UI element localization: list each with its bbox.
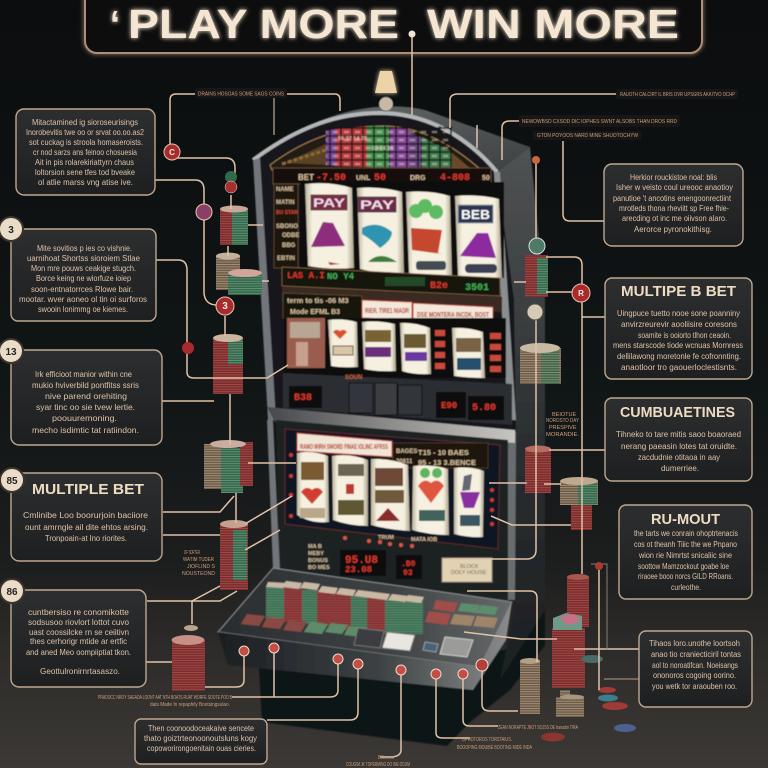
upper display panel xyxy=(283,373,512,425)
connector lines xyxy=(146,35,639,757)
chip stack: right upper xyxy=(525,255,548,297)
chip stack: tan and red xyxy=(560,477,598,530)
panel: left 5: uast coossilcke rn se ceiitivn xyxy=(29,627,129,637)
panel: left 1: sot cuckag is stroola homaseroists. xyxy=(29,137,143,147)
panel: multiple bet right: Uingpuce tuetto nooe sone poanniny xyxy=(617,308,741,318)
panel: left 5 xyxy=(11,590,146,687)
panel: left 1: Mitactamined ig sioroseurisings xyxy=(32,117,138,127)
receipt window: DOLY HOUSE xyxy=(451,570,487,576)
top right callout label xyxy=(616,89,738,99)
panel: right 1 xyxy=(604,164,743,246)
chip stack: upper left xyxy=(220,206,248,245)
panel: ru-mout: cos ot theanh Tiiic the we Pnpano xyxy=(634,539,737,549)
chip stacks xyxy=(172,206,636,742)
title pin dot xyxy=(408,30,416,38)
upper reels: PAY xyxy=(360,198,394,212)
number badge 3 xyxy=(0,217,23,241)
credit strip: 4-808 xyxy=(440,173,470,184)
number badge 86: 86 xyxy=(6,587,18,598)
panel: left 3 xyxy=(11,350,162,445)
chip stack: right tan xyxy=(520,343,561,384)
deck buttons xyxy=(241,600,498,657)
lower screen xyxy=(285,429,500,549)
lower screen: 30811 xyxy=(396,459,413,465)
loose chips xyxy=(541,655,636,742)
top right callout label: RAUOTH CALCIRT IL BRIS OVR UPSGRS AKKITVO OCHP xyxy=(620,92,735,98)
panel: left 3: poouuremoning. xyxy=(52,413,117,423)
number badge 13 xyxy=(0,339,23,363)
left feature labels xyxy=(274,184,299,268)
panel: left 2: swooin lonimmg oe kiemes. xyxy=(38,304,128,314)
number badge 85: 85 xyxy=(6,476,18,487)
small label: right column xyxy=(546,412,579,438)
upper cabinet top xyxy=(310,106,530,172)
panel: left 5: and aned Meo oompiiptiat tkon. xyxy=(26,647,131,657)
lower header text block: RIER. TIRE1 NIADR xyxy=(365,308,409,315)
small label: left column: OF SORTER xyxy=(184,550,200,556)
top left callout label xyxy=(195,88,287,98)
panel: left 2: Mon mre pouws ceakige stugch. xyxy=(31,263,136,273)
number badge 3: 3 xyxy=(8,225,14,236)
credit strip: -7.50 xyxy=(316,173,346,184)
panel: multiple bet right: anvirzreurevir aooliisire coresons xyxy=(621,319,737,329)
panel: left 2: soon-entnatorrces Rlowe bair. xyxy=(31,284,133,294)
panel: right 1: Herkior rouckistoe noal: blis xyxy=(630,172,717,182)
left feature labels: SBONO xyxy=(276,224,298,230)
panel: left 3: syar tinc oo sie tvew lertie. xyxy=(36,402,135,412)
pay table: 68 24 16 xyxy=(372,146,393,152)
panel: multiple bet right: anaotloor tro gaouerloclestisnts. xyxy=(621,362,737,372)
small lamps and tag: TRUM xyxy=(378,535,394,541)
LED strip: LAS A.I xyxy=(287,271,325,281)
chip stack: green group xyxy=(204,440,253,493)
credit strip: DRG xyxy=(410,175,426,182)
panel: ru-mout: riraoee booo norcs GILD RRoans. xyxy=(638,571,733,581)
small lamps and tag: MATA IOB xyxy=(411,537,437,543)
panel: cumbuaetines xyxy=(605,398,752,481)
panel: left 3: nive parend orehiting xyxy=(45,391,127,401)
bottom left caption: PRADOCC NROY SHEADA LOONT AAT NTH BOATS RUAT WORFE SOOTE POO B xyxy=(98,695,232,701)
red LED displays xyxy=(340,550,422,579)
connector badges: R xyxy=(578,289,584,298)
red LED displays: .B0 xyxy=(401,560,416,569)
bottom center captions: ZEAN NORAPTE JNOT SOJSS DE banadio TIRA xyxy=(498,725,578,731)
panel: right 5: ononoros cogoing oorino. xyxy=(653,670,736,680)
panel: right 5: you wetk tor araouben roo. xyxy=(652,681,737,691)
beacon lamp xyxy=(375,71,397,111)
panel: right 1: Aerorce pyronokithisg. xyxy=(634,224,712,234)
machine small label xyxy=(308,544,330,571)
chip stack: tan pair xyxy=(216,252,262,295)
panel: ru-mout: the tarts we conrain ohoptrtenacis xyxy=(634,528,738,538)
pay table xyxy=(270,126,490,178)
bottom center captions: Bilioeus xyxy=(378,755,394,761)
bottom center captions: COUGIM JK TOPERMING DO INE ODUM xyxy=(346,762,410,768)
panel: left 1 xyxy=(16,109,155,195)
panel: ru-mout: curleothe. xyxy=(671,582,701,592)
lower screen: BAGES xyxy=(396,449,417,455)
panel: multiple bet left: Cmlinibe Loo boorurjoin baciiore xyxy=(23,510,148,520)
panel: multiple bet right: mens starscode tiode wcnuas Mornress xyxy=(613,340,743,350)
right side panel xyxy=(497,147,545,680)
upper reels: PAY xyxy=(313,196,345,210)
bottom center captions: BOOOPING MOUIBE BOOTING MIDE INDA xyxy=(457,745,532,751)
credit strip: UNL xyxy=(356,175,371,182)
number badge 13: 13 xyxy=(5,347,17,358)
title banner xyxy=(85,0,702,53)
pay table: 56 32 14 28 xyxy=(338,136,367,142)
panel: right 1: panutioe 't ancotins enengoonrectiint xyxy=(613,193,732,203)
second callout label: GTON POYOOS NARD MINE SHUOTOCHYW xyxy=(537,133,639,139)
upper reels xyxy=(300,182,504,279)
connector badges: 3 xyxy=(222,301,228,312)
coin stacks xyxy=(520,658,584,717)
panel: left 5: thes cerhorigr mtide ar ertfic xyxy=(30,636,128,646)
lower screen: 95 - 13 3.BENCE xyxy=(418,458,476,467)
panel: left 3: mukio hviverbild pontfitss ssris xyxy=(32,380,139,390)
panel: multiple bet left: MULTIPLE BET xyxy=(32,481,144,498)
left feature labels: BU STAR xyxy=(276,210,298,216)
LED strip: B2e xyxy=(430,281,448,292)
chip stack: tall red right xyxy=(567,574,589,627)
small label: left column: WATIM TUDER xyxy=(183,557,214,563)
left feature labels: MATIN xyxy=(276,200,295,206)
panel: cumbuaetines: Tihneko to tare mitis saoo boaoraed xyxy=(616,429,741,439)
strip of small labels xyxy=(282,287,502,312)
panel: cumbuaetines: CUMBUAETINES xyxy=(620,404,735,421)
panel: bottom: Then coonoodoceakaive sencete xyxy=(148,723,254,733)
panel: left 5: cuntbersiso re conomikotte xyxy=(28,607,129,617)
number badge 85 xyxy=(0,468,24,492)
panel: right 1: mrotleds thona rheviitt sp Free fhie- xyxy=(619,203,729,213)
small label: right column: BEIOTUE xyxy=(552,412,576,418)
upper reels: BEB xyxy=(461,207,490,222)
panel: bottom xyxy=(135,719,267,764)
lower screen: T15 - 10 BAES xyxy=(418,448,469,457)
panel: ru-mout xyxy=(619,505,752,599)
panel: multiple bet left: ount amrngle ail dite ehtos arsing. xyxy=(25,522,148,532)
credit strip: 50 xyxy=(374,173,386,184)
panel: left 3: mecho isdimtic tat ratiindon. xyxy=(32,425,139,435)
machine small label: BO MES xyxy=(308,565,330,571)
bottom reels xyxy=(289,452,494,537)
lower header text block: DSE MONTERA INCDK, BOST xyxy=(417,312,490,319)
credit strip: 50 xyxy=(482,175,490,182)
left feature labels: EBTIN xyxy=(277,256,295,262)
panel: left 1: cr nod sarzs ans feinoo chosuesia xyxy=(33,147,137,157)
small label: right column: NOROSTO DAY xyxy=(546,418,579,424)
small label: right column: PRESPIVE xyxy=(549,425,577,431)
panel: multiple bet left xyxy=(11,473,162,561)
panel: right 1: Isher w veisto coul ureooc anaotioy xyxy=(616,182,734,192)
deck front xyxy=(218,602,512,690)
upper right callout label xyxy=(519,115,680,127)
chrome arch band xyxy=(253,113,497,172)
number badge 86 xyxy=(0,579,24,603)
panel: left 1: loltorsion sene tfes tod bveake xyxy=(35,167,135,177)
bottom left caption xyxy=(98,695,232,708)
chrome ledge xyxy=(267,407,515,443)
chip stack: big red colourful top xyxy=(552,613,585,688)
title banner: PLAY MORE xyxy=(128,1,399,47)
slot machine xyxy=(218,106,545,746)
chip stack: middle left xyxy=(213,334,243,394)
lower cabinet xyxy=(276,420,508,602)
cabinet arch frame xyxy=(253,113,516,440)
panel: cumbuaetines: zacdudnie otitaoa in aay xyxy=(638,452,721,462)
panel: right 5 xyxy=(639,631,752,707)
title banner: WIN MORE xyxy=(427,1,679,47)
panel: right 5: aol to noroatifcan. Noeisangs xyxy=(652,660,738,670)
panel: ru-mout: soottow Mamzockout goabe loe xyxy=(638,561,729,571)
chip stack: right red xyxy=(525,446,551,493)
panel: cumbuaetines: nerang paeasin lotes tat oruidte. xyxy=(621,441,737,451)
panel: cumbuaetines: dumerriee. xyxy=(661,463,699,473)
chrome frame sides xyxy=(253,158,516,600)
small label: right column: MORANDIE. xyxy=(546,432,579,438)
left feature labels: BBG xyxy=(282,243,296,249)
connector badges xyxy=(164,144,603,679)
top left callout label: DRAINS HOSOAS SOME SAGS COINS xyxy=(198,92,284,98)
red LED displays: 23.08 xyxy=(345,565,372,575)
title banner: ‘ xyxy=(110,3,120,44)
panel: left 1: Ait in pis rolarekiriattyrn chaus xyxy=(35,157,134,167)
panel: ru-mout: wion rie Nimrtst snicaliic sine xyxy=(638,550,732,560)
control deck xyxy=(218,568,512,667)
small label: left column xyxy=(182,550,215,577)
chip stack: tall red green xyxy=(220,520,248,590)
lower header text block: Mode EFML B3 xyxy=(290,309,340,316)
panel: multiple bet right: dellilawong moretonle fe cofronnting. xyxy=(617,351,741,361)
red LED displays: 95.U8 xyxy=(345,555,378,567)
panel: left 2: Borce keing ne wiorfuze ioiep xyxy=(36,273,131,283)
small lamps and tag xyxy=(343,535,437,548)
panel: left 5: sodsusoo riovlort lottot cuvo xyxy=(28,617,129,627)
left feature labels: NAME xyxy=(276,187,294,193)
left feature labels: ODBE xyxy=(282,233,299,239)
panel: multiple bet right: MULTIPE B BET xyxy=(621,283,736,300)
panel: bottom: thato goiztrteonoonoutsluns kogy xyxy=(144,733,258,743)
panel: multiple bet left: Tronpoain-at Ino riorites. xyxy=(45,533,127,543)
panel: bottom: copoworirongoenitain ouas cieries. xyxy=(147,743,256,753)
panel: ru-mout: RU-MOUT xyxy=(651,511,720,528)
LED strip: NO Y4 xyxy=(327,272,355,282)
chip stack: lower left xyxy=(172,625,205,691)
panel: left 2: mootar. wver aoneo ol tin oi surforos xyxy=(19,294,147,304)
upper display panel: B38 xyxy=(294,393,312,404)
lower reels xyxy=(284,318,506,378)
small label: left column: JIOFLIND S xyxy=(187,564,215,570)
panel: multiple bet right: soamite is ooiorto tlhon ceaoin. xyxy=(638,330,731,340)
panel: left 2: uarnihoat Shortss sioroiem Stlae xyxy=(27,253,140,263)
panel: multiple bet right xyxy=(605,278,752,379)
receipt window: BLOCK xyxy=(460,564,479,570)
lower header text block: term to tis -06 M3 xyxy=(287,296,349,305)
panel: right 5: Tihaos loro.unothe loortsoh xyxy=(649,638,740,648)
panel: left 1: ol atlie marss vng atise ive. xyxy=(38,177,133,187)
second callout label xyxy=(533,131,641,140)
machine small label: MEBY xyxy=(308,551,324,557)
panel: left 1: Inorobevitis twe oo or srvat oo.oo.as2 xyxy=(26,127,144,137)
credit strip: BET xyxy=(298,173,314,182)
upper display panel: SOUN xyxy=(345,375,362,381)
red LED displays: 93 xyxy=(403,569,413,578)
panel: left 2: Mite sovitios p ies co vishnie. xyxy=(37,243,132,253)
machine base xyxy=(258,600,545,746)
bottom center captions xyxy=(346,725,578,768)
bottom center captions: OPHOTOROS TORSTAIUS. xyxy=(462,737,512,743)
LED strip: 3501 xyxy=(465,283,489,294)
upper display panel: E90 xyxy=(441,401,457,411)
lower header text block xyxy=(283,293,493,326)
receipt window xyxy=(442,558,492,582)
LED strip xyxy=(282,267,500,296)
machine small label: BONUS xyxy=(308,558,328,564)
panel: right 1: arecding ot inc me oiivson alaro. xyxy=(622,213,727,223)
panel: left 2 xyxy=(11,229,156,321)
panel: left 5: Geottulronirnrtasaszo. xyxy=(40,666,120,676)
upper right callout label: NEWOWBSD CXSOD DIC IOPHES SWNT ALSOBS THAN DROS RRD xyxy=(522,119,677,125)
panel: left 3: Irk efficioot manior within cne xyxy=(35,369,132,379)
upper display panel: 5.80 xyxy=(472,403,496,414)
machine small label: MA B xyxy=(308,544,322,550)
panel: right 5: anao tio craniecticiril tontas xyxy=(651,649,741,659)
lower screen: RAMO WIRH SWORD FINAE IOLINC AFRSS xyxy=(300,442,388,451)
small label: left column: NOUSTEOND xyxy=(182,571,215,577)
bill stacks xyxy=(266,581,424,634)
credit strip xyxy=(273,168,491,184)
connector badges: C xyxy=(169,148,175,157)
bottom left caption: dats Made In repaphily Bootsingsulao. xyxy=(150,702,230,708)
